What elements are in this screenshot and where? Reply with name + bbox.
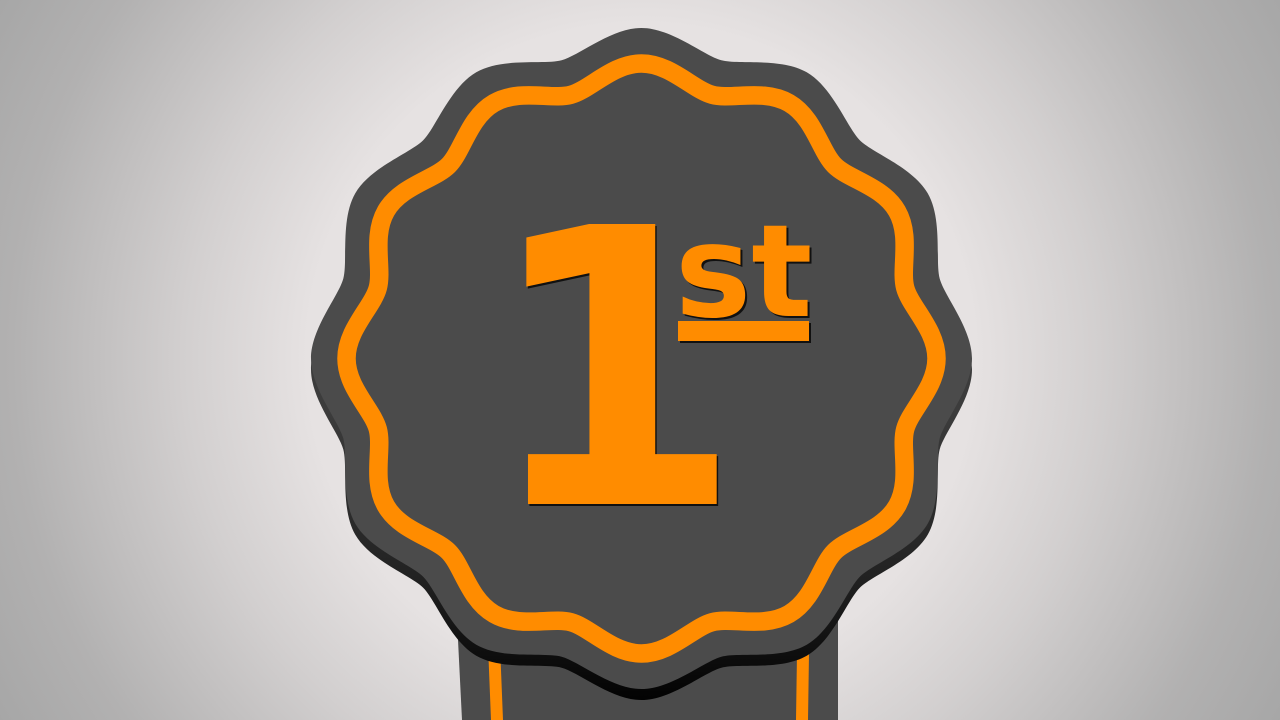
badge orange outline [346,64,936,654]
badge [311,28,972,700]
ribbon tail [456,600,838,720]
ribbon right orange stripe [796,620,810,720]
underline [678,321,811,343]
ribbon left orange stripe [487,620,503,720]
badge shadow [311,39,972,700]
numeral 1: 1 [485,148,742,595]
ordinal suffix st: st [675,198,812,347]
numeral 1: 1 [486,150,744,597]
badge face [311,28,972,689]
ordinal suffix st: st [677,200,814,349]
